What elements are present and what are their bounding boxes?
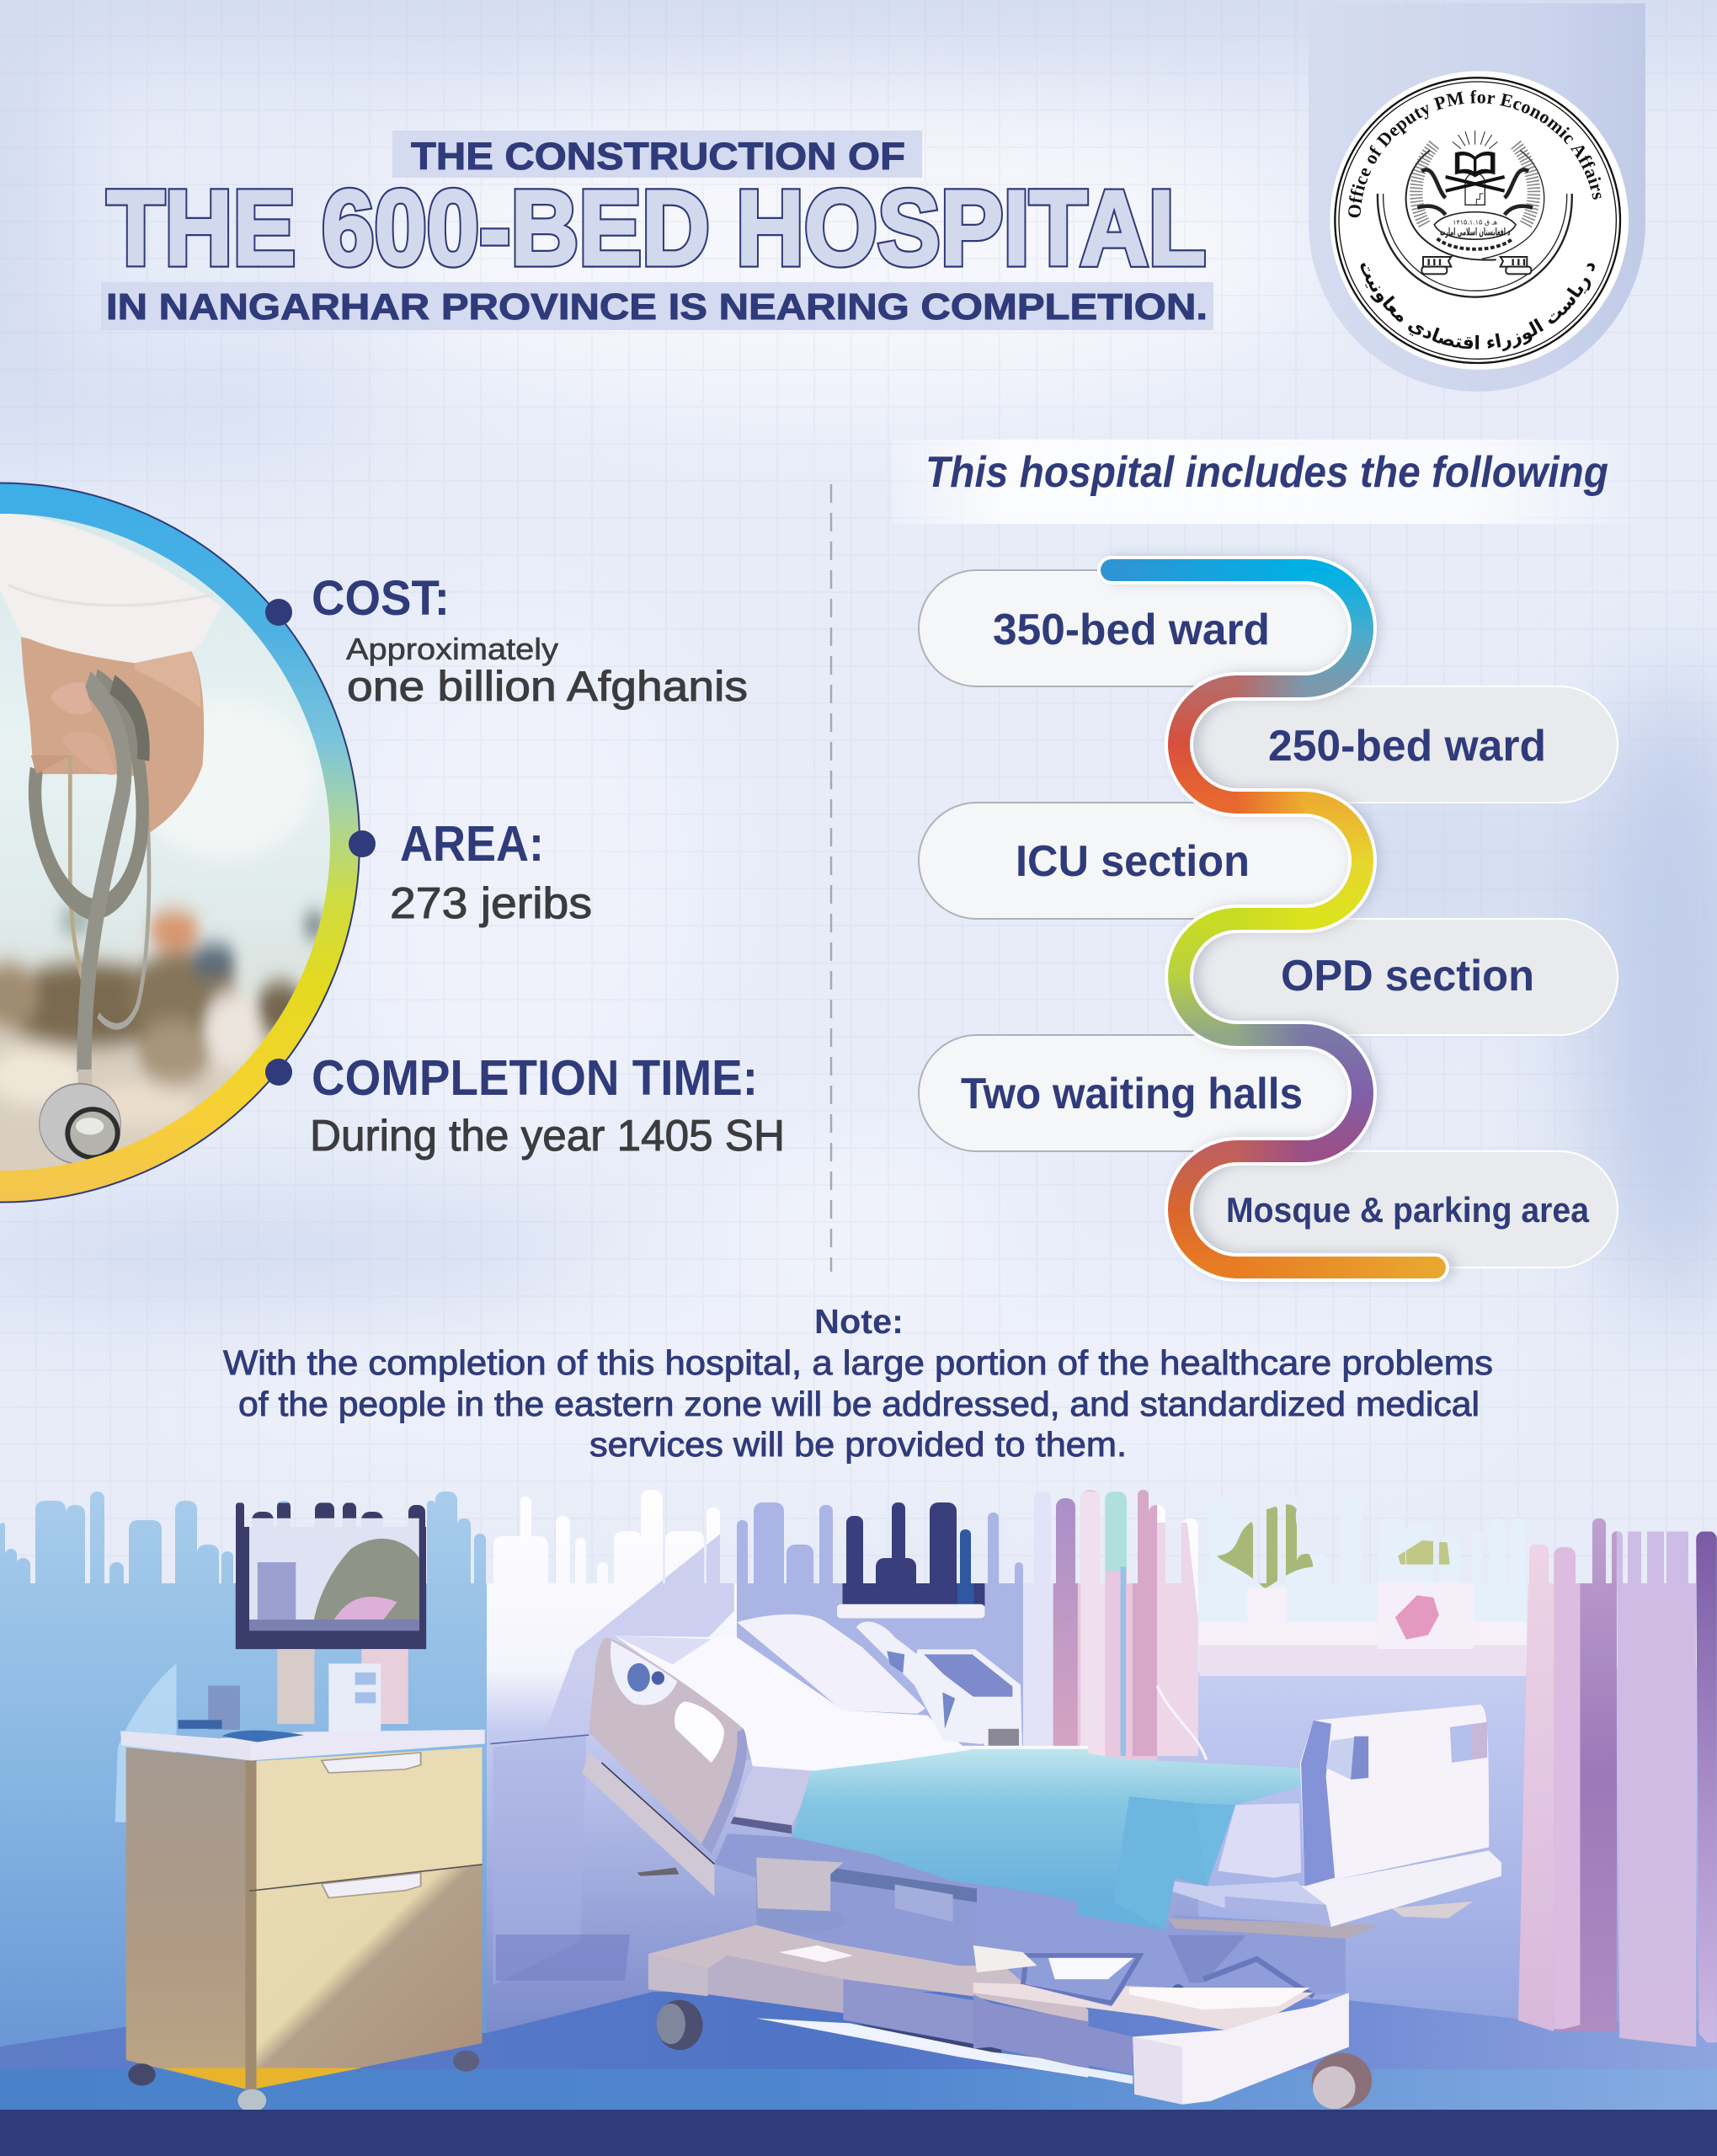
note: of the people in the eastern zone will be addressed, and standardized medical	[238, 1385, 1480, 1423]
blanket near end	[792, 1749, 1088, 1900]
note: With the completion of this hospital, a large portion of the healthcare problems	[223, 1343, 1493, 1382]
seal: Office of Deputy PM for Economic Affairs: ۱۴۱۵.۱.۱۵ هـ ق	[1453, 219, 1497, 227]
pill: Mosque and parking area: Mosque & parking area	[1226, 1190, 1590, 1230]
pill: 250-bed ward: 250-bed ward	[1268, 722, 1546, 771]
seal: Office of Deputy PM for Economic Affairs: Office of Deputy PM for Economic Affairs	[1348, 89, 1602, 217]
area block: 273 jeribs	[390, 879, 592, 928]
wheel	[657, 2000, 703, 2050]
emblem	[1378, 131, 1572, 297]
handles	[322, 1753, 421, 1773]
bed base	[973, 1983, 1314, 2030]
patient bed	[582, 1501, 1501, 2109]
bedside cabinet	[120, 1502, 485, 2112]
mattress head end	[615, 1636, 1088, 1786]
pill: 350-bed ward	[919, 570, 1362, 686]
pill: OPD section: OPD section	[1281, 952, 1534, 1001]
ribbon	[1112, 569, 1442, 1267]
casters	[128, 2063, 156, 2085]
completion time block: COMPLETION TIME:	[312, 1050, 758, 1106]
area block: AREA:	[400, 816, 544, 872]
cost block: COST:	[312, 571, 450, 626]
wall shadows and light	[115, 1523, 734, 1985]
far rail	[856, 1621, 986, 1744]
head section, pillow and rails	[582, 1614, 1088, 2078]
gradient ring	[0, 483, 360, 1203]
logo panel	[1309, 3, 1645, 392]
heading: hospital includes: This hospital includes the following	[925, 448, 1608, 497]
completion time block	[310, 1050, 785, 1161]
mattress foot	[1218, 1803, 1301, 1878]
completion time block: During the year 1405 SH	[310, 1112, 785, 1161]
near head rail	[589, 1637, 747, 1854]
title line 3: IN NANGARHAR PROVINCE IS NEARING COMPLETION.	[106, 286, 1208, 328]
window and plants	[1198, 1492, 1527, 1676]
pill: ICU section	[919, 803, 1362, 919]
curtains by bed	[1023, 1487, 1207, 1760]
monitor	[236, 1502, 426, 1649]
stethoscope	[35, 680, 149, 1072]
note: services will be provided to them.	[589, 1425, 1127, 1464]
bed platform	[1171, 1850, 1501, 1927]
blanket main	[970, 1749, 1349, 1930]
seal: Office of Deputy PM for Economic Affairs: د ریاست الوزراء اقتصادي معاونیت	[1361, 263, 1595, 352]
footer bar	[0, 2110, 1717, 2156]
foot section	[970, 1705, 1501, 2109]
title line 2: outlined headline: THE 600-BED HOSPITAL	[107, 168, 1206, 287]
title line 2: outlined headline: THE 600-BED HOSPITAL	[107, 168, 1206, 287]
photo circle: hand holding stethoscope	[0, 483, 376, 1228]
wheel	[1312, 2053, 1372, 2109]
hand	[21, 637, 204, 833]
pill: Mosque and parking area	[1179, 1151, 1618, 1267]
note: Note:	[814, 1302, 904, 1341]
cost block	[312, 571, 748, 710]
monitor at bed head	[837, 1501, 984, 1618]
illustration: hospital room	[0, 1482, 1717, 2156]
base frame left	[648, 1925, 1088, 2023]
icon: potted plant	[1218, 1504, 1314, 1622]
room walls and floor	[0, 1482, 1717, 2156]
cabinet body	[126, 1748, 249, 2090]
list of sections: winding ribbon	[919, 569, 1618, 1267]
footboard	[1300, 1705, 1489, 1886]
cost block: one billion Afghanis	[347, 663, 748, 710]
area block	[390, 816, 592, 928]
pill: Two waiting halls: Two waiting halls	[961, 1070, 1303, 1118]
pillow	[737, 1614, 925, 1714]
pill: ICU section: ICU section	[1016, 837, 1250, 886]
under deck	[977, 1885, 1346, 2006]
curtain right	[1518, 1518, 1717, 2047]
seal: Office of Deputy PM for Economic Affairs	[1330, 71, 1629, 370]
pill: 250-bed ward	[1179, 686, 1618, 803]
cost block: Approximately	[346, 632, 558, 666]
pill: Two waiting halls	[919, 1035, 1362, 1151]
seal: Office of Deputy PM for Economic Affairs: د افغانستان اسلامي امارت	[1440, 225, 1511, 237]
pill: OPD section	[1179, 919, 1618, 1035]
marker dots	[265, 599, 292, 626]
heading: hospital includes	[893, 440, 1650, 524]
coat sleeve	[0, 512, 221, 663]
flower box	[1378, 1540, 1474, 1649]
title	[101, 131, 1213, 330]
under deck	[714, 1833, 1088, 1967]
note	[223, 1302, 1493, 1464]
pill: 350-bed ward: 350-bed ward	[993, 606, 1270, 654]
title line 1: THE CONSTRUCTION OF	[411, 135, 905, 178]
photo	[0, 514, 330, 1171]
fingers	[51, 682, 93, 715]
